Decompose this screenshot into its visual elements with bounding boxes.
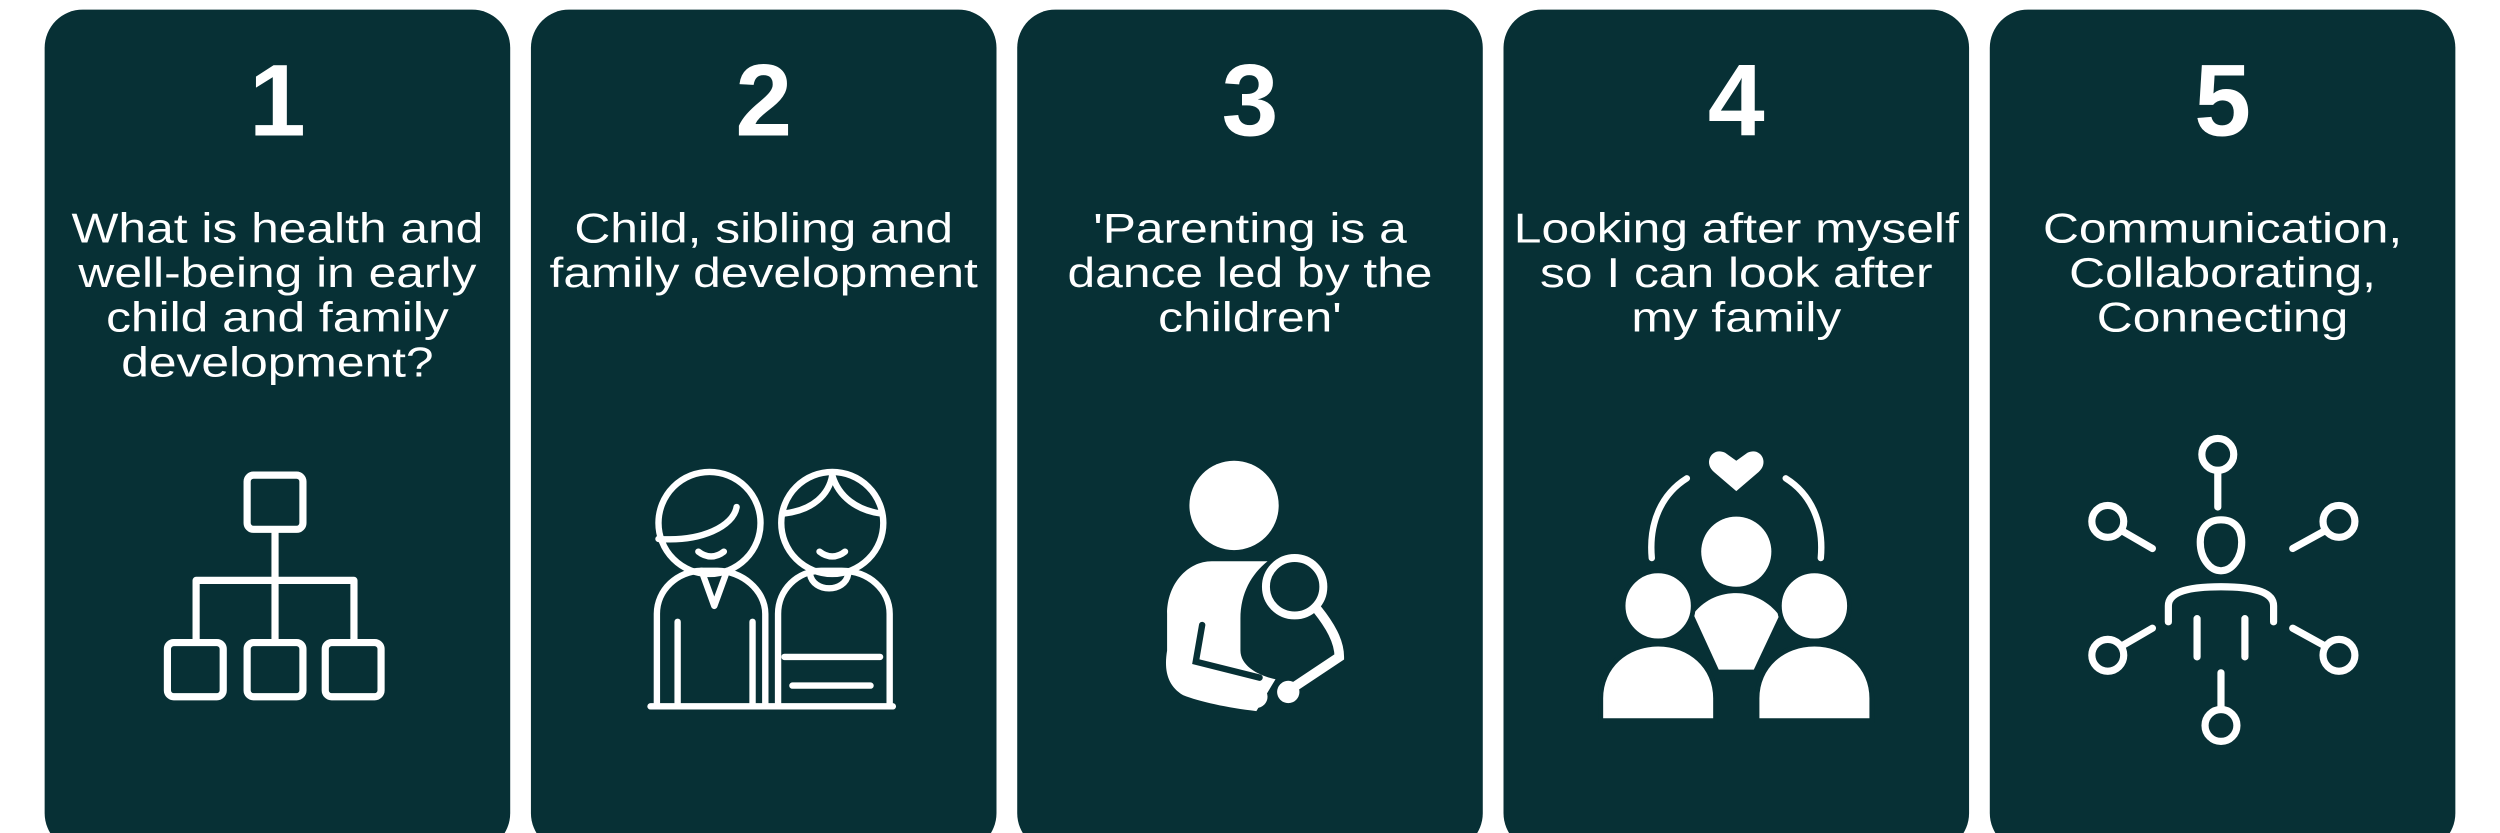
number 1: 1	[249, 44, 306, 158]
icon: two children	[651, 472, 893, 706]
number 5: 5	[2194, 44, 2251, 158]
text: card 1 heading: What is health and	[72, 205, 483, 251]
text: card 4 heading: Looking after myself	[1514, 205, 1959, 251]
text: card 5 heading: Communication,	[2043, 205, 2402, 251]
number 3: 3	[1222, 44, 1278, 158]
text: card 3 heading: dance led by the	[1068, 250, 1432, 296]
icon: family care	[1601, 451, 1872, 721]
number 4: 4	[1708, 44, 1765, 158]
number 2: 2	[735, 44, 792, 158]
text: card 5 heading: Connecting	[2097, 295, 2348, 341]
panel: card 4	[1504, 10, 1969, 833]
text: card 3 heading: children'	[1158, 295, 1342, 341]
icon: parent holding child	[1166, 461, 1339, 711]
panel: card 3	[1017, 10, 1483, 833]
text: card 2 heading: Child, sibling and	[574, 205, 953, 251]
icon: hierarchy	[167, 475, 381, 697]
text: card 4 heading: so I can look after	[1540, 250, 1933, 296]
panel: card 2	[531, 10, 996, 833]
text: card 3 heading: 'Parenting is a	[1093, 205, 1407, 251]
text: card 5 heading: Collaborating,	[2069, 250, 2376, 296]
panel: card 1	[45, 10, 510, 833]
text: card 1 heading: well-being in early	[77, 250, 477, 296]
text: card 4 heading: my family	[1631, 295, 1841, 341]
text: card 1 heading: development?	[121, 339, 434, 385]
icon: network person	[2092, 438, 2355, 741]
panel: card 5	[1990, 10, 2455, 833]
text: card 1 heading: child and family	[106, 295, 449, 341]
text: card 2 heading: family development	[550, 250, 978, 296]
